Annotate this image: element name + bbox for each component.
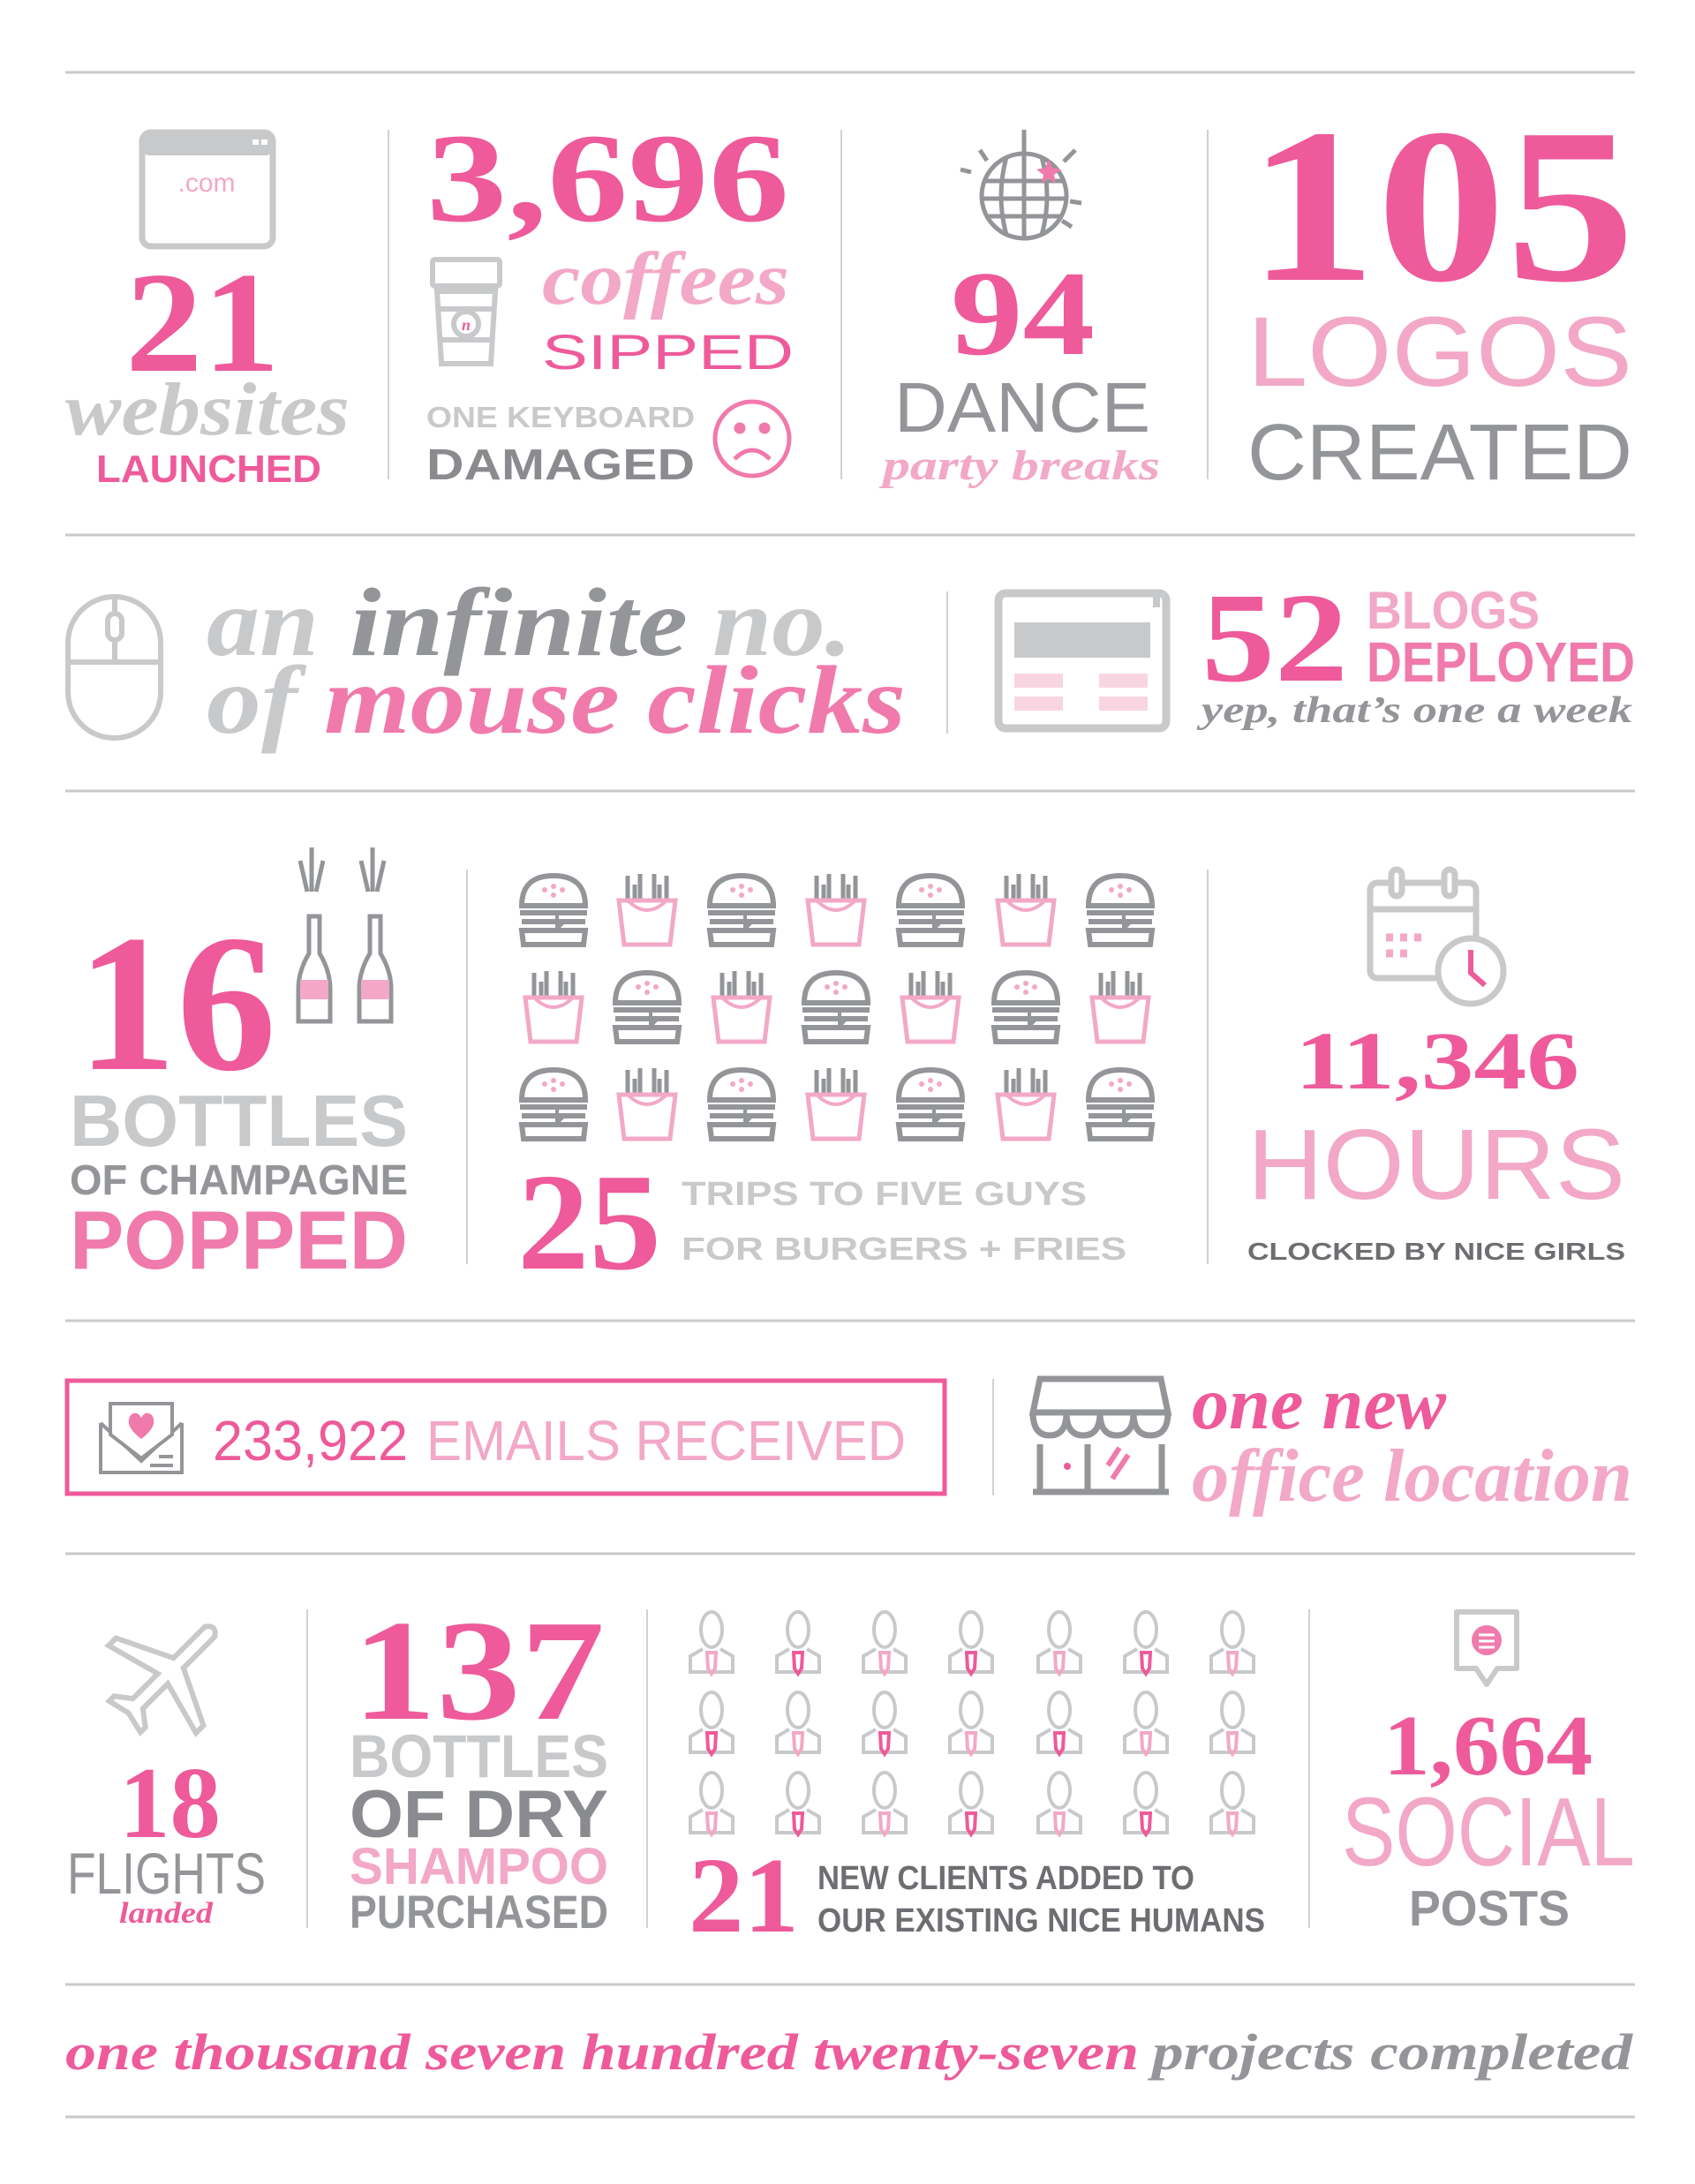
panel: flights: landed (119, 1897, 214, 1930)
footer: projects completed (65, 2023, 1633, 2081)
text: logos: LOGOS (1247, 297, 1632, 407)
text: social posts: SOCIAL (1342, 1778, 1635, 1887)
number 1,664: 1,664 (1383, 1698, 1593, 1793)
icon: calendar clock (1370, 870, 1503, 1004)
icon: champagne bottles (298, 847, 391, 1021)
text: new clients: NEW CLIENTS ADDED TO (817, 1860, 1194, 1897)
number 21: 21 (125, 244, 280, 403)
text: blogs deployed: BLOGS (1367, 581, 1540, 640)
number 25: 25 (517, 1145, 661, 1299)
text: flights landed: FLIGHTS (67, 1841, 266, 1906)
icon: storefront (1033, 1379, 1169, 1492)
panel: emails: EMAILS RECEIVED (426, 1409, 906, 1472)
panel: new office: office location (1192, 1435, 1632, 1518)
panel: dance (878, 130, 1160, 489)
number 18: 18 (119, 1747, 221, 1860)
text: launched: LAUNCHED (96, 448, 321, 491)
text: trips to five guys: TRIPS TO FIVE GUYS (682, 1176, 1087, 1213)
icon: blog page (998, 593, 1166, 728)
panel: dry shampoo (350, 1592, 608, 1939)
panel: flights (67, 1585, 266, 1930)
text: hours: HOURS (1247, 1109, 1625, 1220)
text: created: CREATED (1247, 409, 1632, 497)
text: sipped: SIPPED (542, 324, 794, 380)
panel: champagne: POPPED (70, 1194, 408, 1286)
headline: an infinite no. of mouse clicks: an (207, 569, 319, 676)
panel: mouse clicks (68, 569, 906, 754)
footer: projects completed: projects completed (1147, 2023, 1633, 2081)
icon: browser .com: .com (177, 169, 236, 198)
text: yep, that's one a week: yep, that’s one a week (1196, 690, 1632, 731)
panel: hours (1247, 870, 1625, 1265)
icon: chat bubble (1457, 1612, 1517, 1684)
icon: mouse (68, 597, 161, 738)
headline: an infinite no. of mouse clicks: infinite (350, 569, 688, 676)
panel: blogs (998, 568, 1635, 731)
icon: sad face (715, 402, 789, 476)
icon grid: people (690, 1612, 1254, 1834)
text: one new office location: one new (1192, 1362, 1446, 1445)
panel: social posts (1342, 1612, 1635, 1937)
number 52: 52 (1202, 568, 1348, 709)
panel: five guys (517, 874, 1154, 1299)
panel: champagne: OF CHAMPAGNE (70, 1157, 408, 1204)
text: damaged: DAMAGED (426, 441, 695, 489)
text: bottles of dry shampoo purchased: BOTTLES (350, 1722, 608, 1790)
text: coffees: coffees (542, 237, 789, 320)
icon: browser .com (142, 132, 273, 246)
panel: coffees (426, 109, 794, 489)
panel: new clients (689, 1612, 1265, 1955)
panel: logos (1247, 84, 1635, 497)
headline: an infinite no. of mouse clicks (207, 569, 906, 754)
icon: airplane (81, 1585, 257, 1760)
headline: an infinite no. of mouse clicks: of (207, 646, 307, 754)
footer: projects completed: one thousand seven hundred twenty-seven (65, 2023, 1139, 2081)
panel: websites (65, 132, 350, 491)
icon: coffee cup: n (462, 316, 471, 334)
panel: dry shampoo: OF DRY (350, 1777, 608, 1852)
text: one keyboard: ONE KEYBOARD (426, 401, 695, 433)
icon: disco ball (960, 130, 1081, 238)
panel: emails (67, 1381, 945, 1494)
text: party breaks: party breaks (878, 442, 1160, 489)
number 137: 137 (352, 1592, 605, 1751)
number 105: 105 (1247, 84, 1635, 328)
number 94: 94 (951, 246, 1095, 380)
number 16: 16 (77, 895, 276, 1112)
icon grid: burgers and fries (520, 874, 1154, 1139)
panel: dry shampoo: PURCHASED (350, 1887, 608, 1939)
text: dance: DANCE (894, 368, 1150, 447)
headline: an infinite no. of mouse clicks: no. (712, 569, 852, 676)
number 11,346: 11,346 (1295, 1016, 1579, 1107)
panel: five guys: FOR BURGERS + FRIES (682, 1231, 1126, 1267)
text: websites: websites (65, 368, 350, 451)
icon: coffee cup (433, 260, 500, 364)
headline: an infinite no. of mouse clicks: mouse clicks (324, 646, 906, 754)
panel: blogs: DEPLOYED (1367, 630, 1635, 694)
panel: new office (1033, 1362, 1632, 1518)
number 3,696: 3,696 (426, 109, 789, 249)
text: clocked by nice girls: CLOCKED BY NICE GIRLS (1247, 1238, 1625, 1265)
text: emails received: 233,922 (213, 1409, 408, 1472)
panel: dry shampoo: SHAMPOO (350, 1838, 608, 1895)
panel: new clients: OUR EXISTING NICE HUMANS (817, 1902, 1265, 1939)
number 21: 21 (689, 1836, 799, 1955)
panel: social posts: POSTS (1409, 1880, 1570, 1937)
icon: envelope with heart (101, 1404, 182, 1472)
text: bottles of champagne popped: BOTTLES (70, 1080, 408, 1162)
panel: champagne (70, 847, 408, 1286)
